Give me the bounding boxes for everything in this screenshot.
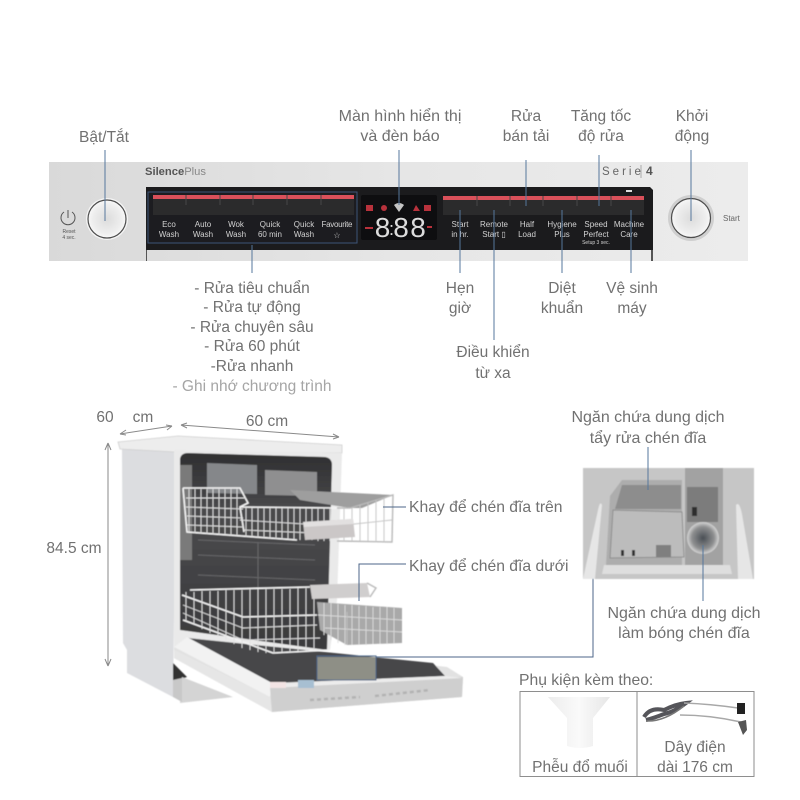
dimension: height: 84.5 cm [46, 540, 102, 557]
dispenser photo [583, 447, 754, 601]
label: upper rack: Khay để chén đĩa trên [409, 498, 562, 516]
label: cord [657, 739, 733, 776]
toe kick [173, 663, 187, 682]
display: : [389, 219, 394, 239]
label: half load [503, 108, 549, 145]
brand: Serie 4: 4 [646, 164, 653, 178]
label: delay start: giờ [449, 300, 471, 317]
label: programs list: - Rửa chuyên sâu [190, 319, 314, 336]
power icon: 4 sec. [62, 235, 76, 241]
brand: Serie 4: Serie [602, 166, 644, 178]
program buttons: Wash [193, 230, 213, 239]
door detergent box highlight [317, 656, 376, 680]
label: start: động [675, 128, 709, 145]
option buttons: Half [520, 220, 535, 229]
label: programs list: - Rửa 60 phút [204, 338, 301, 355]
label: delay start [446, 280, 474, 317]
dimension: depth: cm [133, 409, 153, 426]
label: rinse aid compartment: làm bóng chén đĩa [618, 625, 750, 642]
option buttons: Start [452, 220, 469, 229]
start knob [668, 195, 714, 241]
label: display: và đèn báo [360, 128, 440, 145]
leader: dispenser [376, 577, 593, 657]
label: display: Màn hình hiển thị [339, 107, 461, 125]
dimension: width: 60 cm [246, 413, 288, 430]
label: programs list: - Rửa tự động [203, 299, 301, 316]
leader: rinse aid [702, 545, 704, 601]
dimension: height [46, 443, 111, 666]
label: lower rack: Khay để chén đĩa dưới [409, 557, 568, 575]
brand: SilencePlus: SilencePlus [145, 166, 206, 178]
label: machine care: máy [617, 300, 647, 317]
option buttons: Load [518, 230, 536, 239]
label: cord: dài 176 cm [657, 759, 733, 776]
program buttons: Wash [294, 230, 314, 239]
label: half load: Rửa [511, 108, 541, 125]
label: machine care: Vệ sinh [606, 280, 658, 297]
accessories table [520, 691, 754, 776]
option buttons: Machine [614, 220, 645, 229]
label: display [339, 107, 461, 145]
open door [174, 637, 463, 712]
dimension: width [181, 413, 339, 439]
leader: detergent [647, 447, 649, 490]
program buttons [148, 192, 357, 243]
side wall [122, 449, 176, 697]
label: funnel: Phễu đổ muối [532, 759, 628, 776]
label: detergent compartment: Ngăn chứa dung dịch [571, 409, 725, 426]
label: programs list: -Rửa nhanh [211, 358, 293, 375]
label: programs list: - Rửa tiêu chuẩn [194, 280, 310, 297]
display: 8 [410, 212, 426, 243]
power icon [61, 210, 76, 241]
start label: Start [723, 214, 741, 223]
label: programs list [172, 280, 332, 395]
dimension: depth [96, 409, 172, 435]
power icon: Reset [62, 229, 76, 235]
upper rack [183, 488, 393, 542]
display: 8 [375, 212, 390, 243]
lower rack [182, 583, 402, 653]
program buttons: Auto [195, 220, 212, 229]
option buttons: Start ▯ [482, 230, 506, 239]
option buttons: Plus [554, 230, 570, 239]
dark control strip [146, 187, 653, 250]
label: programs list: - Ghi nhớ chương trình [172, 378, 332, 395]
label: rinse aid compartment: Ngăn chứa dung dịch [607, 605, 761, 622]
label: hygiene: khuẩn [541, 300, 583, 317]
label: remote: Điều khiển [456, 344, 530, 361]
icon: power cord [644, 703, 747, 735]
option buttons: in hr. [451, 230, 469, 239]
option buttons: Perfect [583, 230, 609, 239]
option buttons: Setup 3 sec. [582, 240, 610, 246]
callout leader lines [105, 150, 691, 340]
top cover [118, 436, 342, 453]
dishwasher [118, 436, 463, 712]
program buttons: ☆ [333, 231, 341, 240]
label: rinse aid compartment [607, 605, 761, 642]
program buttons: Quick [260, 220, 281, 229]
program buttons: Eco [162, 220, 176, 229]
label: remote: từ xa [475, 365, 511, 382]
label: delay start: Hẹn [446, 280, 474, 297]
option buttons: Care [620, 230, 638, 239]
power knob [86, 198, 128, 240]
option buttons: Hygiene [547, 220, 577, 229]
option buttons [443, 190, 645, 246]
label: start [675, 108, 709, 145]
program buttons: Wash [226, 230, 246, 239]
option buttons: Speed [584, 220, 608, 229]
label: speed: Tăng tốc [571, 108, 631, 125]
label: cord: Dây điện [664, 739, 726, 756]
program buttons: 60 min [258, 230, 282, 239]
label: hygiene [541, 280, 583, 317]
leader: lower rack [359, 564, 406, 601]
option buttons: Remote [480, 220, 509, 229]
label: detergent compartment [571, 409, 725, 447]
program buttons: Favourite [322, 220, 353, 229]
label: hygiene: Diệt [548, 280, 576, 297]
label: detergent compartment: tẩy rửa chén đĩa [590, 429, 706, 447]
label: speed: độ rửa [578, 128, 624, 145]
icon: salt funnel [548, 697, 610, 748]
accessories heading: Phụ kiện kèm theo: [519, 672, 653, 689]
program buttons: Wash [159, 230, 179, 239]
label: Bật/Tắt: Bật/Tắt [79, 129, 130, 146]
display [361, 195, 437, 243]
label: start: Khởi [676, 108, 708, 125]
program buttons: Quick [294, 220, 315, 229]
label: remote [456, 344, 530, 382]
label: machine care [606, 280, 658, 317]
label: half load: bán tải [503, 128, 549, 145]
dimension: depth: 60 [96, 409, 114, 426]
front frame [174, 450, 342, 650]
leader: upper rack [383, 506, 406, 508]
display: 8 [393, 212, 409, 243]
cavity [180, 453, 332, 650]
program buttons: Wok [228, 220, 245, 229]
control panel [49, 162, 748, 261]
label: speed [571, 108, 631, 145]
